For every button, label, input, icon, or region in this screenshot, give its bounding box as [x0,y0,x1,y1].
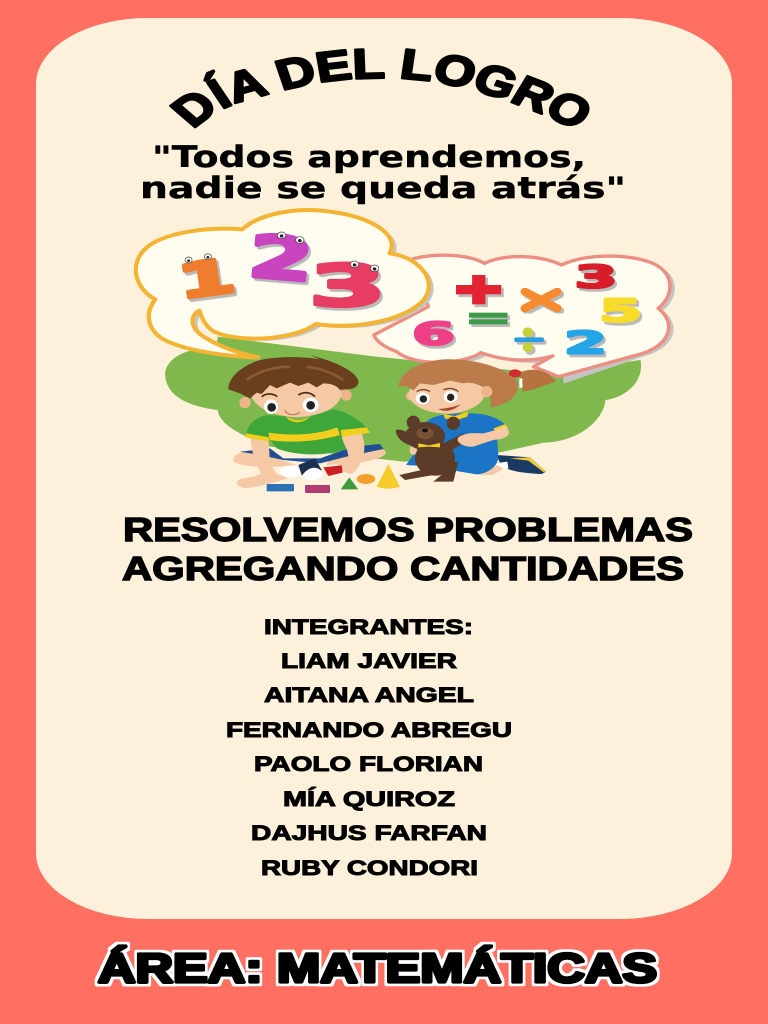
digits with eyes: 1 [174,248,239,310]
times sign [525,292,557,308]
boy legs [233,451,297,467]
heading: problem statement: RESOLVEMOS PROBLEMAS [123,511,693,548]
girl [398,359,556,476]
list: team members: FERNANDO ABREGU [226,719,512,742]
illustration: children [228,355,556,493]
quote text: nadie se queda atrás" [140,171,626,205]
boy head [239,397,251,408]
teddy bear [396,416,468,482]
girl dress [406,413,507,474]
divide sign [514,327,544,352]
digits: 3 [575,259,617,295]
plus sign [456,275,501,304]
list: team members: RUBY CONDORI [261,857,478,880]
title: Día del Logro: DÍA DEL LOGRO [169,48,590,128]
quote text: "Todos aprendemos, [152,140,586,174]
equals sign [469,313,508,324]
digits [412,259,642,361]
list: team members [226,616,512,880]
toy blocks [267,464,400,493]
left bubble: numbers [136,210,434,360]
list: team members: AITANA ANGEL [264,684,474,707]
digits: 2 [564,325,607,361]
girl arm [458,426,509,447]
boy [228,355,386,488]
boy shoes [280,466,300,478]
list: team members: DAJHUS FARFAN [251,822,487,845]
digits: 6 [412,316,455,352]
girl head [406,392,414,400]
girl collar [443,412,468,420]
list: team members: PAOLO FLORIAN [254,753,483,776]
heading: problem statement [122,511,693,587]
illustration: math speech bubbles [136,210,675,462]
digits with eyes: 3 [309,253,386,319]
girl ponytail [517,370,556,392]
digits with eyes: 2 [246,222,316,296]
boy shirt [246,409,369,454]
digits with eyes [174,222,386,319]
girl shoe and legs [497,455,546,474]
quote text [140,140,626,205]
heading: problem statement: AGREGANDO CANTIDADES [122,550,684,587]
boy hair [228,355,358,398]
boy arms [236,438,288,488]
right bubble: operations [374,255,675,384]
green bush [165,337,641,462]
girl face details [416,388,461,411]
boy face details [262,393,319,415]
list: team members: LIAM JAVIER [281,650,457,673]
panel: cream card [36,18,732,919]
list: team members: MÍA QUIROZ [283,788,455,811]
list: team members: INTEGRANTES: [264,616,473,639]
footer: subject area: ÁREA: MATEMÁTICAS [98,945,657,991]
digits: 5 [599,293,642,329]
girl hair [398,359,518,407]
